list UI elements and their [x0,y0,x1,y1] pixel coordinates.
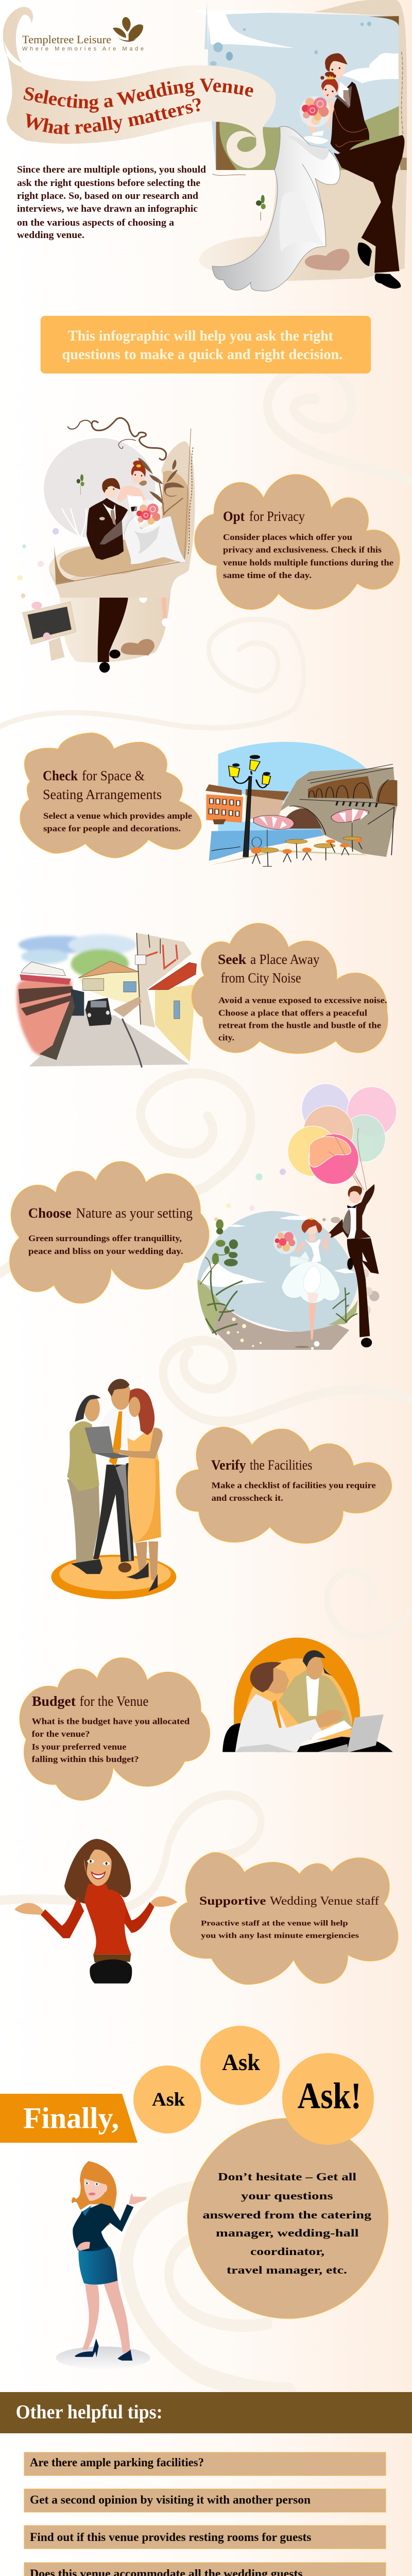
heading and body [199,1894,379,1940]
heading and body: privacy and exclusiveness. Check if this [223,545,382,554]
panel: Choose Nature as your setting [10,1083,397,1350]
cloud bubble [20,733,201,858]
intro paragraph: right place. So, based on our research and [17,191,198,201]
heading and body: Avoid a venue exposed to excessive noise. [218,995,387,1005]
heading and body: retreat from the hustle and bustle of the [218,1020,381,1030]
intro paragraph: wedding venue. [17,230,84,241]
bubble: answer text: manager, wedding-hall [216,2227,359,2239]
bubble: Ask large: Ask! [298,2075,362,2116]
heading and body [32,1693,190,1764]
heading and body: and crosscheck it. [212,1493,283,1503]
heading and body: Verify [211,1457,246,1472]
logo: Templetree Leisure: Templetree Leisure [22,33,111,46]
heading and body: Green surroundings offer tranquillity, [28,1233,182,1243]
tip 2 [24,2489,386,2512]
logo: Templetree Leisure [22,17,144,52]
illustration: two colleagues at laptop [222,1638,393,1752]
cloud bubble [20,1658,210,1800]
heading and body: a Place Away [250,952,320,967]
heading and body [28,1206,193,1256]
heading and body: Check [43,768,78,783]
heading and body: Is your preferred venue [32,1742,127,1752]
illustration: three people with laptop [51,1379,176,1599]
intro paragraph [17,164,206,241]
illustration: venice bridge cafe [205,742,397,867]
section header: Other helpful tips [0,2392,412,2433]
panel: header [3,0,407,292]
heading and body: What is the budget have you allocated [32,1717,190,1726]
bubble: answer text: answered from the catering [203,2209,372,2221]
panel: tips list [24,2452,386,2576]
heading and body: city. [218,1032,234,1043]
heading and body: Budget [32,1693,76,1709]
heading and body: Opt [223,509,245,524]
tip 3 [24,2526,386,2549]
heading and body: peace and bliss on your wedding day. [28,1246,183,1256]
panel: Opt for Privacy [17,418,400,673]
panel: Budget for the Venue [20,1638,393,1800]
heading and body: Make a checklist of facilities you require [212,1481,376,1490]
panel: Verify the Facilities [51,1379,391,1599]
title: Selecting a Wedding Venue [24,78,253,113]
illustration: bride and groom portrait [300,53,399,156]
heading and body: Seating Arrangements [43,787,162,802]
heading and body: Seek [218,952,246,967]
heading and body [211,1457,376,1503]
tip 2: Get a second opinion by visiting it with another person [30,2494,311,2506]
panel: Seek a Place Away from City Noise [16,923,388,1067]
illustration: woman in red sweater [14,1839,177,1984]
section header: Other helpful tips: Other helpful tips: [16,2401,163,2423]
cloud bubble [176,1427,391,1543]
bubble: answer text: travel manager, etc. [227,2264,347,2276]
tip 1 [24,2452,386,2476]
heading and body: Choose [28,1206,72,1221]
bubble: answer text: Don’t hesitate – Get all [218,2171,356,2183]
panel: Finally ask [0,2026,388,2369]
heading and body: for the Venue [79,1693,149,1709]
banner: Finally: Finally, [23,2101,119,2135]
banner ribbon [3,7,276,168]
illustration: couple on bench [17,418,195,673]
illustration: balloons and dancing couple [197,1083,397,1350]
intro paragraph: interviews, we have drawn an infographic [17,204,198,214]
cloud bubble [195,474,400,609]
illustration: watercolor street [16,933,197,1067]
tip 4 [24,2563,386,2576]
woman pointing [56,2161,150,2369]
heading and body [43,768,192,834]
heading and body: space for people and decorations. [43,823,181,834]
bubble: Ask medium: Ask [222,2049,260,2075]
heading and body: Supportive [199,1894,266,1907]
heading and body: same time of the day. [223,570,312,580]
cloud bubble [170,1853,398,1985]
panel: Supportive Wedding Venue staff [14,1839,398,1985]
heading and body [218,952,387,1043]
illustration: hero window scene [192,0,407,291]
callout: orange intro box: questions to make a quick and right decision. [62,346,342,363]
logo: Templetree Leisure: Where Memories Are Made [22,46,144,52]
heading and body: Proactive staff at the venue will help [201,1920,348,1928]
heading and body: Select a venue which provides ample [43,811,192,821]
heading and body: falling within this budget? [32,1754,139,1764]
heading and body: for Space & [82,768,145,783]
intro paragraph: Since there are multiple options, you should [17,164,206,175]
heading and body: Nature as your setting [76,1206,193,1221]
heading and body: from City Noise [221,970,301,986]
tip 3: Find out if this venue provides resting rooms for guests [30,2531,311,2544]
bubble: Ask medium [200,2026,280,2105]
bubble: answer text: your questions [241,2190,333,2202]
heading and body: for Privacy [249,509,305,524]
cloud bubble [10,1162,209,1303]
title: What really matters? [26,98,201,134]
cloud bubble [192,923,388,1054]
bubble: answer text [187,2119,388,2318]
bubble: answer text: coordinator, [250,2245,324,2258]
tip 1: Are there ample parking facilities? [30,2456,204,2469]
heading and body: Choose a place that offers a peaceful [218,1008,367,1018]
heading and body: the Facilities [250,1457,312,1472]
bubble: Ask small: Ask [152,2089,185,2110]
callout: orange intro box: This infographic will help you ask the right [68,328,333,344]
heading and body: for the venue? [32,1729,90,1739]
heading and body [223,509,393,580]
bubble: Ask small [133,2065,201,2133]
heading and body: Consider places which offer you [223,532,352,542]
callout: orange intro box [41,316,371,374]
heading and body: Wedding Venue staff [270,1894,379,1907]
banner: Finally [0,2094,138,2143]
intro paragraph: ask the right questions before selecting the [17,178,200,189]
intro paragraph: on the various aspects of choosing a [17,217,175,228]
heading and body: you with any last minute emergiencies [201,1932,359,1940]
heading and body: venue holds multiple functions during the [223,557,393,568]
bubble: Ask large [282,2053,374,2145]
panel: Check for Space and Seating [20,733,397,867]
title [24,78,253,134]
